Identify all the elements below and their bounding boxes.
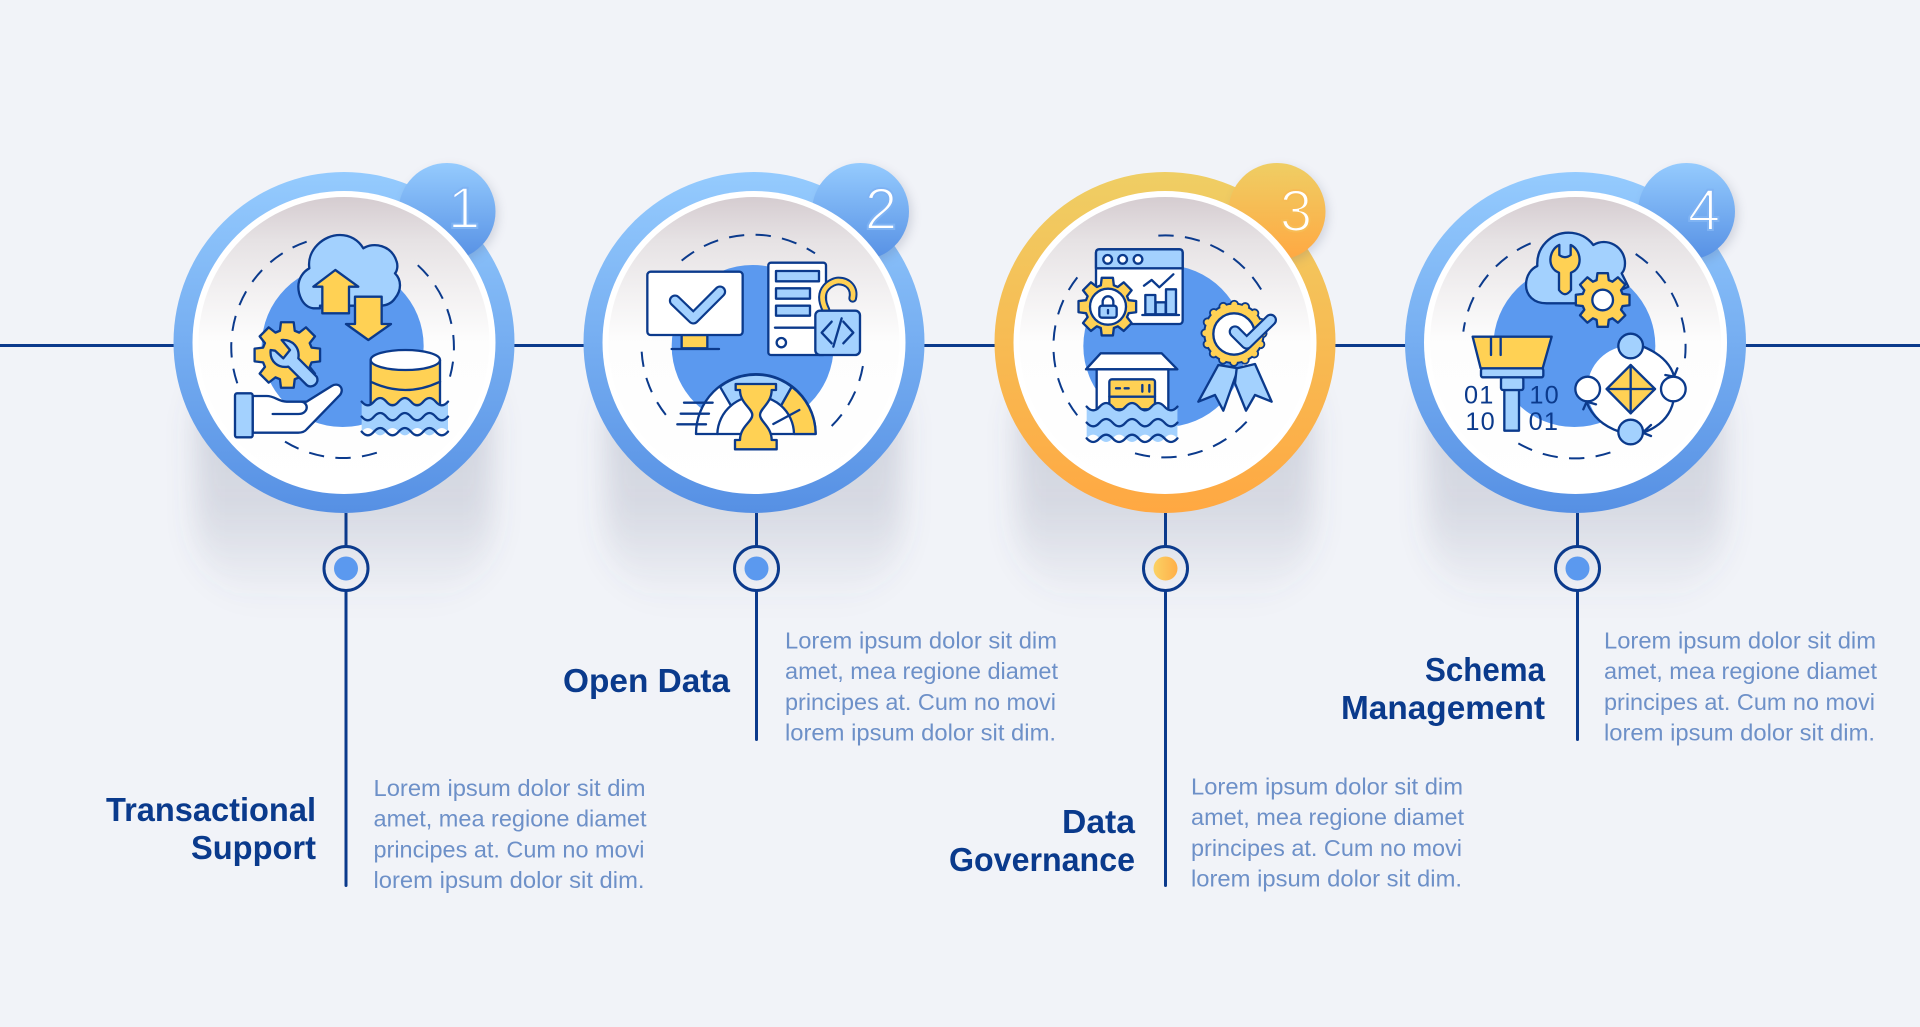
connector line with marker — [1556, 513, 1600, 741]
number badge 2: 2 — [865, 177, 897, 242]
connector line with marker — [734, 513, 778, 741]
body text: lorem ipsum dolor sit dim. — [785, 720, 1056, 746]
body text: Lorem ipsum dolor sit dim — [1604, 628, 1876, 654]
connector line with marker — [324, 513, 368, 887]
heading: Transactional Support: Support — [191, 829, 316, 866]
body text: principes at. Cum no movi — [1191, 835, 1462, 861]
drop shadow — [1428, 350, 1724, 605]
body text: amet, mea regione diamet — [1604, 658, 1877, 684]
heading: Open Data: Open Data — [563, 662, 731, 699]
heading: Schema Management — [1341, 651, 1546, 726]
body text: lorem ipsum dolor sit dim. — [1191, 866, 1462, 892]
panel: step 2 Open Data — [563, 163, 1058, 746]
body text: principes at. Cum no movi — [1604, 689, 1875, 715]
body text — [1191, 774, 1464, 892]
body text — [785, 628, 1058, 746]
panel: step 1 Transactional Support — [106, 163, 647, 893]
icon: cloud tools, broom, binary, cycle: 10 — [1465, 408, 1495, 436]
body text: lorem ipsum dolor sit dim. — [374, 867, 644, 893]
icon: dashboard, security gear, warehouse, award — [1053, 235, 1272, 457]
icon: cloud, gear, hand, database — [231, 235, 454, 458]
heading: Data Governance — [949, 803, 1136, 878]
body text: amet, mea regione diamet — [374, 806, 647, 832]
number badge 4 — [1638, 163, 1738, 263]
outer ring — [1405, 172, 1746, 513]
body text: amet, mea regione diamet — [1191, 804, 1464, 830]
body text: amet, mea regione diamet — [785, 658, 1058, 684]
number badge 1 — [398, 163, 498, 263]
inner white disc — [1424, 191, 1727, 494]
body text: lorem ipsum dolor sit dim. — [1604, 720, 1875, 746]
number badge 3 — [1228, 163, 1328, 263]
body text: Lorem ipsum dolor sit dim — [374, 775, 646, 801]
icon: cloud tools, broom, binary, cycle — [1463, 233, 1686, 458]
body text: Lorem ipsum dolor sit dim — [1191, 774, 1463, 800]
drop shadow — [196, 350, 492, 605]
icon: cloud tools, broom, binary, cycle: 01 — [1464, 381, 1493, 409]
outer ring — [174, 172, 514, 513]
body text — [1604, 628, 1877, 746]
heading: Schema Management: Schema — [1425, 651, 1546, 688]
number badge 4: 4 — [1688, 178, 1720, 243]
heading: Transactional Support: Transactional — [106, 791, 316, 828]
connector line with marker — [1144, 513, 1188, 887]
drop shadow — [1017, 350, 1313, 605]
heading: Schema Management: Management — [1341, 689, 1545, 726]
inner white disc — [602, 191, 906, 494]
icon: cloud tools, broom, binary, cycle: 01 — [1529, 408, 1558, 436]
body text — [374, 775, 647, 893]
number badge 3: 3 — [1280, 179, 1312, 244]
panel: step 4 Schema Management — [1341, 163, 1877, 746]
drop shadow — [606, 350, 902, 605]
body text: principes at. Cum no movi — [374, 836, 644, 862]
number badge 1: 1 — [448, 176, 480, 241]
outer ring — [584, 172, 924, 513]
number badge 2 — [812, 163, 912, 263]
heading: Transactional Support — [106, 791, 316, 866]
heading: Data Governance: Data — [1062, 803, 1136, 840]
icon: cloud tools, broom, binary, cycle: 10 — [1529, 381, 1559, 409]
inner white disc — [192, 191, 496, 494]
icon: monitor, server lock, speed gauge — [642, 235, 863, 449]
inner white disc — [1014, 191, 1316, 494]
panel: step 3 Data Governance — [949, 163, 1464, 892]
body text: principes at. Cum no movi — [785, 689, 1056, 715]
body text: Lorem ipsum dolor sit dim — [785, 628, 1057, 654]
heading: Data Governance: Governance — [949, 841, 1135, 878]
outer ring — [994, 172, 1336, 513]
timeline horizontal line — [0, 344, 1920, 347]
